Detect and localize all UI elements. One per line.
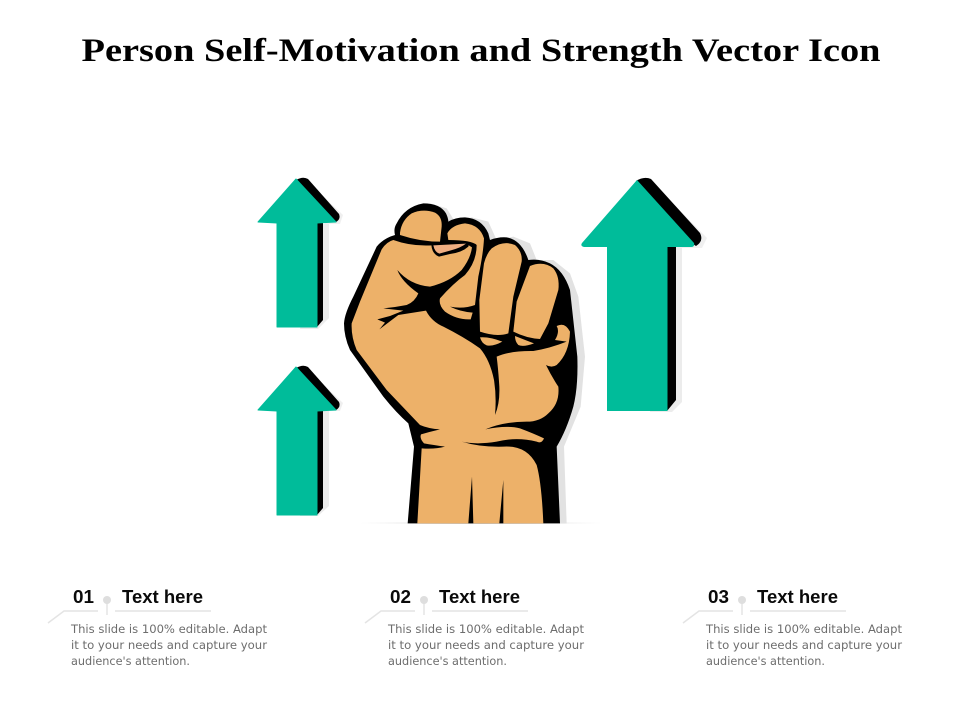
item 01 description	[70, 622, 267, 668]
item 03 connector	[683, 596, 846, 623]
item 03 description	[705, 622, 902, 668]
item 02 description	[387, 622, 584, 668]
item 03 description: audience's attention.	[706, 654, 825, 668]
icon: thumbnail	[431, 243, 469, 257]
item 02	[365, 587, 584, 668]
icon: large arrow	[581, 178, 707, 412]
item 01 description: audience's attention.	[71, 654, 190, 668]
item 02 connector	[365, 596, 528, 623]
item 02 heading: Text here	[439, 587, 520, 607]
item 02 number: 02	[390, 587, 411, 607]
item 02 description: it to your needs and capture your	[388, 638, 584, 652]
item 01 description: This slide is 100% editable. Adapt	[70, 622, 267, 636]
item 01 number: 01	[73, 587, 94, 607]
icon: small lower arrow	[258, 366, 343, 516]
icon: clenched fist	[344, 203, 585, 523]
item 01 heading: Text here	[122, 587, 203, 607]
icon: small upper arrow	[258, 178, 343, 329]
item 03	[683, 587, 902, 668]
item 02 description: audience's attention.	[388, 654, 507, 668]
ground shadow	[360, 522, 602, 524]
item 02 description: This slide is 100% editable. Adapt	[387, 622, 584, 636]
title: Person Self-Motivation and Strength Vector Icon	[82, 33, 880, 69]
item 03 description: it to your needs and capture your	[706, 638, 902, 652]
item 01 connector	[48, 596, 211, 623]
item 03 heading: Text here	[757, 587, 838, 607]
item 01 description: it to your needs and capture your	[71, 638, 267, 652]
item 01	[48, 587, 267, 668]
item 03 number: 03	[708, 587, 729, 607]
item 03 description: This slide is 100% editable. Adapt	[705, 622, 902, 636]
